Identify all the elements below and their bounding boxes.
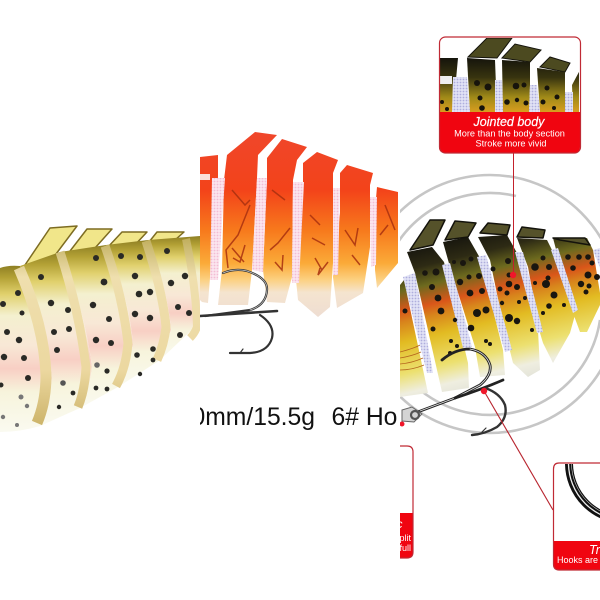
callout description: Stroke more vivid (476, 138, 546, 148)
callout: split ring (partly cropped) (400, 445, 414, 559)
grey rings (400, 174, 600, 434)
spec text: 0mm/15.5g (192, 404, 315, 431)
leader line: treble hook (481, 388, 553, 510)
caption description: Hooks are (557, 555, 598, 565)
box border (554, 463, 600, 570)
spots (402, 254, 600, 355)
callout: treble hook (partly cropped) (552, 462, 600, 571)
tan rib bands (19, 239, 197, 423)
lure segments (400, 235, 600, 397)
panel: orange lure close-up (200, 132, 398, 353)
leftmost belly detail (400, 345, 424, 370)
leader line: jointed body (510, 153, 516, 278)
callout heading: Jointed body (473, 115, 545, 129)
highlight on first segment (200, 174, 210, 180)
panel: lure close-up spotted side (0, 226, 200, 432)
hook photo (565, 464, 600, 518)
caption bar (553, 541, 600, 570)
dark red veins (226, 190, 395, 275)
orange body segments (200, 132, 398, 317)
scale strips (403, 248, 600, 373)
callout: split ring (partly cropped): full (399, 543, 411, 553)
callout caption bar (439, 112, 580, 153)
panel: annotated lure diagram (400, 36, 600, 571)
callout photo (440, 38, 580, 112)
treble hook (200, 270, 277, 353)
small red dot at hook eye (400, 422, 404, 426)
callout: split ring (partly cropped): c (396, 517, 402, 531)
callout description (454, 130, 564, 146)
callout: split ring (partly cropped): split (395, 533, 411, 543)
dark fins (410, 220, 590, 250)
dorsal fins (25, 226, 184, 265)
black spots (0, 248, 192, 427)
body segments (0, 236, 200, 432)
callout: jointed body (439, 37, 580, 153)
spec text (200, 407, 396, 430)
callout description: More than the body section (454, 128, 565, 138)
caption heading: Tr (589, 543, 600, 557)
spec text: 6# Hook (332, 404, 424, 431)
callout border (440, 37, 580, 153)
treble hook on lure (402, 349, 506, 435)
pink scale strips (210, 178, 377, 283)
